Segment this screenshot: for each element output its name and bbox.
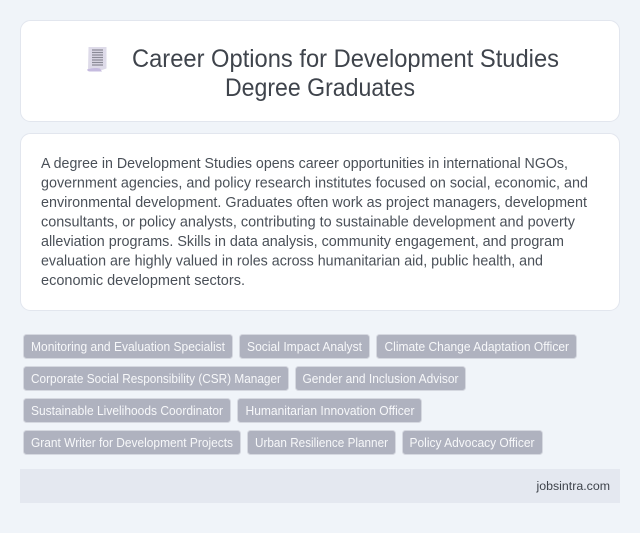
tag: Humanitarian Innovation Officer: Humanitarian Innovation Officer	[246, 404, 414, 418]
description text: evaluation are highly valued in roles across humanitarian aid, public health, and	[41, 254, 543, 270]
description text: economic development sectors.	[41, 273, 245, 289]
title text: Degree Graduates	[225, 74, 415, 102]
tag: Sustainable Livelihoods Coordinator: Sustainable Livelihoods Coordinator	[31, 404, 223, 418]
tag: Corporate Social Responsibility (CSR) Manager: Corporate Social Responsibility (CSR) Manager	[31, 372, 281, 386]
icon: document scroll	[87, 47, 106, 72]
tag: Urban Resilience Planner	[248, 430, 396, 454]
tag: Policy Advocacy Officer	[402, 430, 542, 454]
tag: Climate Change Adaptation Officer: Climate Change Adaptation Officer	[384, 340, 569, 354]
panel: title card	[20, 20, 620, 122]
tag: Social Impact Analyst: Social Impact Analyst	[247, 340, 362, 354]
tag: Humanitarian Innovation Officer	[238, 398, 422, 422]
tag: Urban Resilience Planner: Urban Resilience Planner	[255, 436, 388, 450]
description text: alleviation programs. Skills in data analysis, community engagement, and program	[41, 234, 564, 250]
tag: Grant Writer for Development Projects	[24, 430, 240, 454]
description text: government agencies, and policy research institutes focused on social, economic, and	[41, 176, 588, 192]
tag: Corporate Social Responsibility (CSR) Manager	[24, 366, 288, 390]
panel: description card	[20, 134, 620, 310]
tag: Sustainable Livelihoods Coordinator	[24, 398, 230, 422]
tag: Monitoring and Evaluation Specialist	[24, 334, 232, 358]
description text: environmental development. Graduates often work as project managers, development	[41, 195, 587, 211]
tag: Gender and Inclusion Advisor	[296, 366, 466, 390]
tag: Monitoring and Evaluation Specialist: Monitoring and Evaluation Specialist	[31, 340, 225, 354]
tag: Grant Writer for Development Projects: Grant Writer for Development Projects	[31, 436, 233, 450]
tag: Social Impact Analyst	[240, 334, 370, 358]
tag: Climate Change Adaptation Officer	[376, 334, 576, 358]
description text: A degree in Development Studies opens career opportunities in international NGOs,	[41, 156, 568, 172]
tag: Gender and Inclusion Advisor: Gender and Inclusion Advisor	[302, 372, 458, 386]
description text: consultants, or policy analysts, contributing to sustainable development and poverty	[41, 214, 576, 230]
tag list	[24, 334, 576, 454]
tag: Policy Advocacy Officer: Policy Advocacy Officer	[410, 436, 534, 450]
footer bar	[20, 469, 620, 503]
title text: Career Options for Development Studies	[132, 45, 559, 73]
footer text: jobsintra.com	[536, 479, 610, 493]
title text	[132, 45, 559, 102]
description text	[41, 156, 588, 289]
